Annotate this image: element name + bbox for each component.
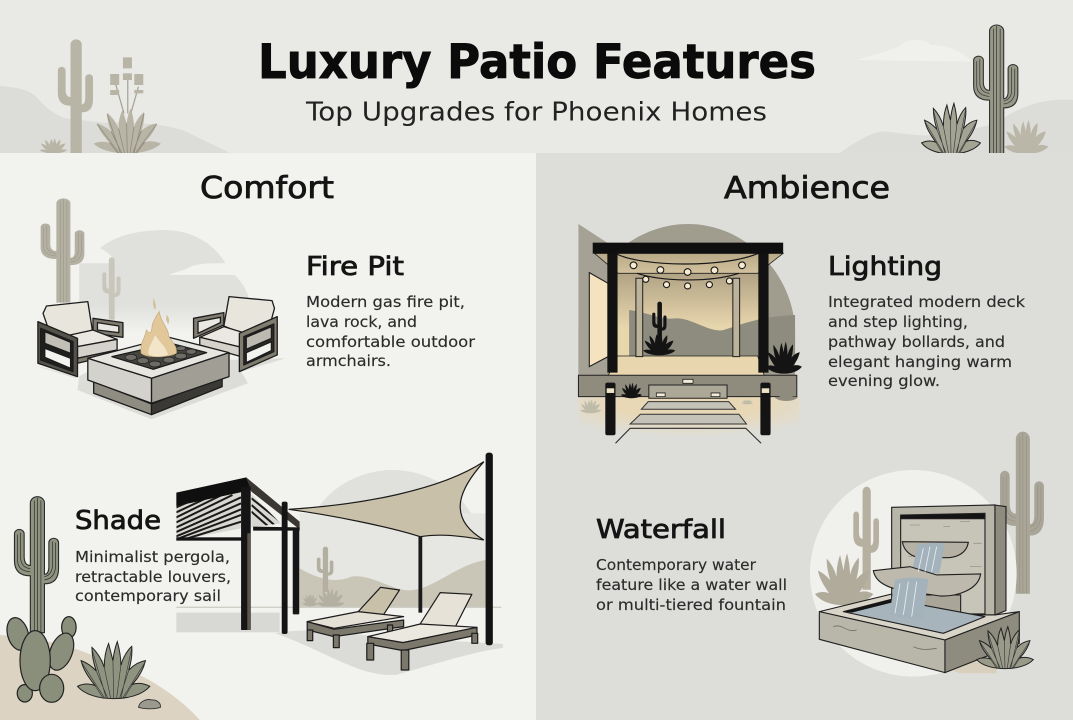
illustration: desert plants corner <box>0 497 200 720</box>
label: fire pit text: armchairs. <box>306 352 391 370</box>
heading: ambience: Ambience <box>724 171 890 206</box>
label: lighting text <box>828 252 1025 390</box>
panel: ambience <box>536 153 1073 720</box>
illustration: lighting <box>578 224 802 444</box>
left armchair <box>38 302 123 377</box>
header left desert scene <box>0 39 231 153</box>
bollards <box>605 383 616 435</box>
label: waterfall text: feature like a water wall <box>596 576 787 594</box>
label: waterfall text: Contemporary water <box>596 556 757 574</box>
illustration: fire pit <box>33 198 286 419</box>
label: shade text: Minimalist pergola, <box>75 548 230 566</box>
back wall <box>892 505 1006 615</box>
title: Luxury Patio Features <box>258 35 816 90</box>
upper bowl <box>902 542 968 558</box>
illustration: shade pergola and sail <box>176 453 503 675</box>
plants <box>766 342 802 374</box>
header right desert scene <box>839 25 1073 154</box>
string lights <box>617 253 758 280</box>
illustration: waterfall <box>810 432 1044 677</box>
label: fire pit text: comfortable outdoor <box>306 333 476 351</box>
stones <box>138 700 161 709</box>
label: waterfall text <box>596 515 787 614</box>
panel: comfort <box>0 153 536 720</box>
posts and beam <box>607 252 618 373</box>
header band <box>0 0 1073 154</box>
label: fire pit text: Fire Pit <box>306 252 404 282</box>
label: waterfall text: Waterfall <box>596 515 726 545</box>
label: waterfall text: or multi-tiered fountain <box>596 596 786 614</box>
left lounger <box>307 587 404 648</box>
right armchair <box>194 297 277 372</box>
right lounger <box>367 593 478 670</box>
lava rocks <box>125 346 196 367</box>
label: shade text: contemporary sail <box>75 587 221 605</box>
pedestal <box>923 595 961 617</box>
lower water <box>889 578 928 620</box>
label: lighting text: pathway bollards, and <box>828 333 1005 351</box>
label: lighting text: Integrated modern deck <box>828 293 1025 311</box>
basin <box>819 594 1019 673</box>
flame <box>141 298 176 357</box>
label: lighting text: and step lighting, <box>828 313 968 331</box>
label: shade text <box>75 506 231 605</box>
label: lighting text: elegant hanging warm <box>828 353 1012 371</box>
sail <box>289 462 484 540</box>
label: fire pit text: Modern gas fire pit, <box>306 293 465 311</box>
upper water <box>912 543 945 573</box>
heading: comfort: Comfort <box>200 171 334 206</box>
label: lighting text: Lighting <box>828 252 942 282</box>
subtitle: Top Upgrades for Phoenix Homes <box>305 98 767 128</box>
deck and steps <box>578 375 797 397</box>
middle bowl <box>873 567 981 596</box>
label: shade text: retractable louvers, <box>75 568 231 586</box>
label: fire pit text <box>306 252 476 370</box>
label: fire pit text: lava rock, and <box>306 313 417 331</box>
label: shade text: Shade <box>75 506 161 536</box>
pergola <box>176 477 422 634</box>
fire pit body <box>88 337 229 415</box>
label: lighting text: evening glow. <box>828 372 940 390</box>
